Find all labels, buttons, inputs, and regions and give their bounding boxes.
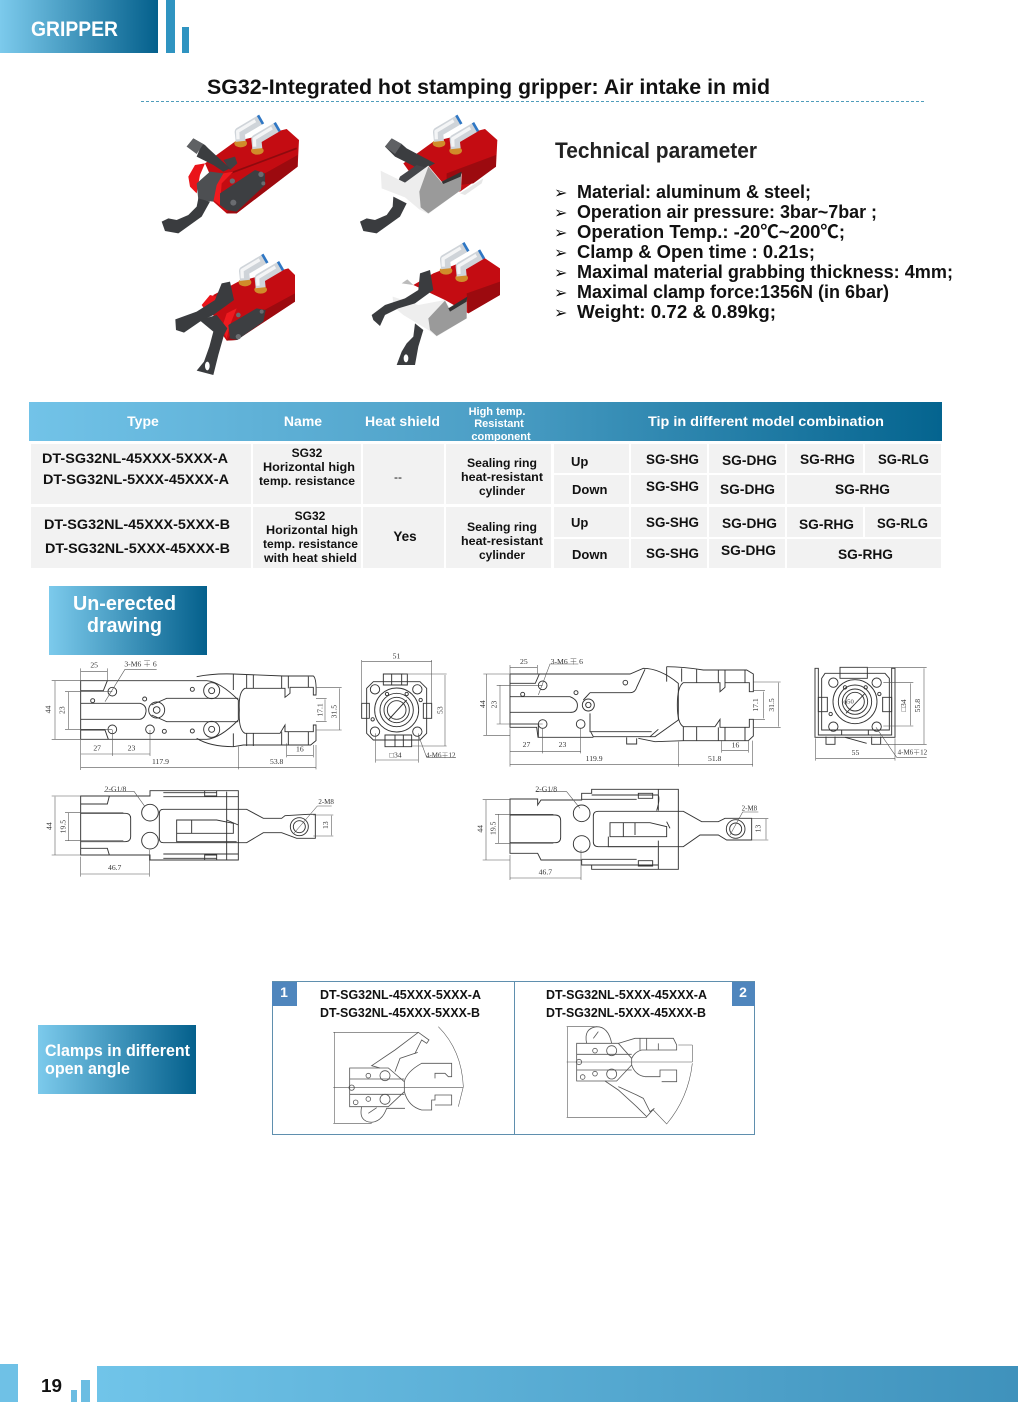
technical drawing: variant B views xyxy=(476,657,928,880)
table row: variant A: Up xyxy=(571,454,588,469)
table row: variant A: DT-SG32NL-5XXX-45XXX-A xyxy=(43,472,229,487)
table row: variant A: temp. resistance xyxy=(259,474,355,488)
drawing: top view: 117.9 xyxy=(152,757,169,766)
drawing: top view with heat shield: 17.1 xyxy=(751,698,760,712)
drawing: side view with heat shield: 46.7 xyxy=(539,868,552,877)
drawing: end view xyxy=(362,652,456,763)
drawing: side view: 44 xyxy=(44,822,53,830)
table row: variant B: SG-RHG xyxy=(799,517,854,532)
table row: variant B: SG-DHG xyxy=(721,543,776,558)
drawing: end view: 51 xyxy=(393,652,400,661)
table row: variant A: SG-DHG xyxy=(722,453,777,468)
table row: variant B: temp. resistance xyxy=(263,537,358,551)
drawing: top view: 23 xyxy=(58,706,67,714)
table row: variant B: Down xyxy=(572,547,607,562)
parameter list: Material: aluminum & steel; xyxy=(577,182,811,202)
drawing: top view: 16 xyxy=(296,745,304,754)
table row: variant A: Sealing ring xyxy=(467,456,537,470)
drawing: side view with heat shield: 2-G1/8 xyxy=(535,785,557,794)
drawing: side view with heat shield xyxy=(476,785,768,880)
drawing: side view xyxy=(44,784,334,877)
table row: variant B: with heat shield xyxy=(263,551,357,565)
model labels: DT-SG32NL-45XXX-5XXX-A xyxy=(320,988,481,1002)
table row: variant B: SG-RLG xyxy=(877,516,928,531)
table row: variant B: heat-resistant xyxy=(461,534,543,548)
table row: variant A: Horizontal high xyxy=(263,460,355,474)
drawing: end view: 4-M6∓12 xyxy=(426,752,456,760)
drawing: top view: 25 xyxy=(90,661,98,670)
parameter list: Maximal material grabbing thickness: 4mm; xyxy=(577,262,953,282)
drawing: top view xyxy=(44,660,342,770)
panel: clamp open angle comparison xyxy=(272,981,755,1134)
drawing: top view with heat shield: 44 xyxy=(478,700,487,708)
badge: 1 xyxy=(272,982,297,1006)
model labels: DT-SG32NL-5XXX-45XXX-A xyxy=(546,988,707,1002)
table header row: Resistant xyxy=(474,418,524,430)
footer bar xyxy=(0,1364,1018,1402)
table header row: Heat shield xyxy=(365,413,440,429)
drawing: end view with heat shield: 4-M6∓12 xyxy=(898,749,928,757)
drawing: clamp 2 open downward xyxy=(567,1027,692,1124)
drawing: side view with heat shield: 13 xyxy=(754,825,763,832)
drawing: clamp 1 open upward xyxy=(333,1027,463,1123)
badge: 2: 2 xyxy=(739,984,747,1000)
panel: technical parameter xyxy=(554,138,953,322)
drawing: top view with heat shield: 3-M6 ∓ 6 xyxy=(551,657,583,666)
parameter list: ➢ xyxy=(554,223,567,242)
parameter list: ➢ xyxy=(554,183,567,202)
table row: variant B: SG-DHG xyxy=(722,516,777,531)
drawing: end view: 53 xyxy=(435,706,444,714)
drawing: end view with heat shield: 55.8 xyxy=(913,699,922,712)
table row: variant A: SG-RLG xyxy=(878,452,929,467)
drawing: top view: 23 xyxy=(128,743,135,752)
parameter list: ➢ xyxy=(554,283,567,302)
section label: un-erected drawing: drawing xyxy=(87,615,162,637)
table row: variant A: DT-SG32NL-45XXX-5XXX-A xyxy=(42,451,228,466)
section label: clamps in different open angle xyxy=(38,1025,196,1094)
table row: variant B: Up xyxy=(571,515,588,530)
table row: variant B: SG-SHG xyxy=(646,546,699,561)
table row: variant A: SG-RHG xyxy=(800,452,855,467)
table row: variant B: SG-RHG xyxy=(838,547,893,562)
parameter list: ➢ xyxy=(554,203,567,222)
table header row: High temp. xyxy=(469,406,525,418)
parameter list xyxy=(554,182,953,322)
gripper render: open without shield xyxy=(175,254,295,375)
table row: variant B: SG-SHG xyxy=(646,515,699,530)
drawing: side view: 2-M8 xyxy=(318,798,334,806)
drawing: top view with heat shield: 23 xyxy=(559,740,566,749)
parameter list: ➢ xyxy=(554,243,567,262)
gripper render: closed with heat shield xyxy=(360,115,497,233)
badge: 1: 1 xyxy=(280,984,288,1000)
drawing: top view: 53.8 xyxy=(270,757,284,766)
drawing: top view with heat shield xyxy=(478,657,781,767)
parameter list: Clamp & Open time : 0.21s; xyxy=(577,242,815,262)
header banner: GRIPPER xyxy=(0,0,189,53)
drawing: top view with heat shield: 23 xyxy=(490,701,499,708)
drawing: top view: 3-M6 ∓ 6 xyxy=(124,660,157,669)
table row: variant B xyxy=(31,507,941,568)
drawing: side view with heat shield: 44 xyxy=(476,825,485,833)
drawing: end view with heat shield: □34 xyxy=(899,699,908,712)
drawing: side view with heat shield: 2-M8 xyxy=(742,805,758,813)
drawing: top view with heat shield: 119.9 xyxy=(586,754,603,763)
badge: 2 xyxy=(732,982,755,1006)
table header row: Type xyxy=(127,413,159,429)
table row: variant A xyxy=(31,444,941,504)
drawing: top view with heat shield: 16 xyxy=(732,741,739,750)
table row: variant B: DT-SG32NL-45XXX-5XXX-B xyxy=(44,517,230,532)
drawing: side view: 46.7 xyxy=(108,863,122,872)
drawing: side view: 2-G1/8 xyxy=(105,784,127,793)
gripper render: open with heat shield xyxy=(372,243,500,365)
drawing: end view with heat shield xyxy=(815,667,928,761)
table row: variant A: SG-RHG xyxy=(835,482,890,497)
section label: clamps in different open angle: open angle xyxy=(45,1060,130,1078)
table header row: Tip in different model combination xyxy=(648,413,884,429)
table row: variant B: cylinder xyxy=(479,548,525,562)
drawing: top view with heat shield: 51.8 xyxy=(708,754,722,763)
table row: variant B: Horizontal high xyxy=(266,523,358,537)
model labels: DT-SG32NL-5XXX-45XXX-B xyxy=(546,1006,706,1020)
product renders: four gripper variants xyxy=(162,115,500,375)
table row: variant A: heat-resistant xyxy=(461,470,543,484)
table row: variant A: SG-SHG xyxy=(646,452,699,467)
table header row: component xyxy=(471,431,531,443)
drawing: side view: 13 xyxy=(321,821,330,829)
model labels: DT-SG32NL-45XXX-5XXX-B xyxy=(320,1006,480,1020)
parameter list: Operation Temp.: -20℃~200℃; xyxy=(577,222,845,242)
table row: variant A: SG-DHG xyxy=(720,482,775,497)
drawing: side view: 19.5 xyxy=(58,820,67,833)
gripper render: closed without shield xyxy=(162,115,299,233)
model labels xyxy=(320,988,707,1020)
section label: un-erected drawing: Un-erected xyxy=(73,593,176,615)
parameter list: Operation air pressure: 3bar~7bar ; xyxy=(577,202,877,222)
drawing: end view with heat shield: 55 xyxy=(852,748,859,757)
drawing: end view with heat shield: φ50 xyxy=(843,698,854,705)
page number: 19 xyxy=(41,1376,62,1396)
drawing: top view with heat shield: 27 xyxy=(523,740,530,749)
parameter list: Maximal clamp force:1356N (in 6bar) xyxy=(577,282,889,302)
drawing: top view: 44 xyxy=(44,706,53,713)
table row: variant A: Down xyxy=(572,482,607,497)
parameter list: Weight: 0.72 & 0.89kg; xyxy=(577,302,776,322)
drawing: top view with heat shield: 31.5 xyxy=(767,698,776,712)
header banner: GRIPPER: GRIPPER xyxy=(31,18,118,41)
drawing: top view: 17.1 xyxy=(316,703,325,717)
drawing: top view with heat shield: 25 xyxy=(520,657,528,666)
drawing: top view: 27 xyxy=(93,743,101,752)
table row: variant A: cylinder xyxy=(479,484,525,498)
table row: variant A: -- xyxy=(394,470,402,484)
parameter list: ➢ xyxy=(554,303,567,322)
table row: variant A: SG32 xyxy=(292,446,323,460)
drawing: end view: □34 xyxy=(389,750,402,759)
specification table xyxy=(29,402,942,568)
section label: clamps in different open angle: Clamps in different xyxy=(45,1042,190,1060)
title: SG32-Integrated hot stamping gripper: Air intake in mid xyxy=(207,75,770,99)
table header row: Name xyxy=(284,413,322,429)
table row: variant B: Sealing ring xyxy=(467,520,537,534)
table header row xyxy=(29,402,942,443)
heading: technical parameter: Technical parameter xyxy=(555,138,757,163)
section label: un-erected drawing xyxy=(49,586,207,655)
drawing: top view: 31.5 xyxy=(330,705,339,718)
table row: variant A: SG-SHG xyxy=(646,479,699,494)
technical drawing: variant A views xyxy=(44,652,456,877)
parameter list: ➢ xyxy=(554,263,567,282)
table row: variant B: SG32 xyxy=(295,509,326,523)
table row: variant B: DT-SG32NL-5XXX-45XXX-B xyxy=(45,541,230,556)
drawing: side view with heat shield: 19.5 xyxy=(488,821,497,835)
table row: variant B: Yes xyxy=(393,529,417,544)
